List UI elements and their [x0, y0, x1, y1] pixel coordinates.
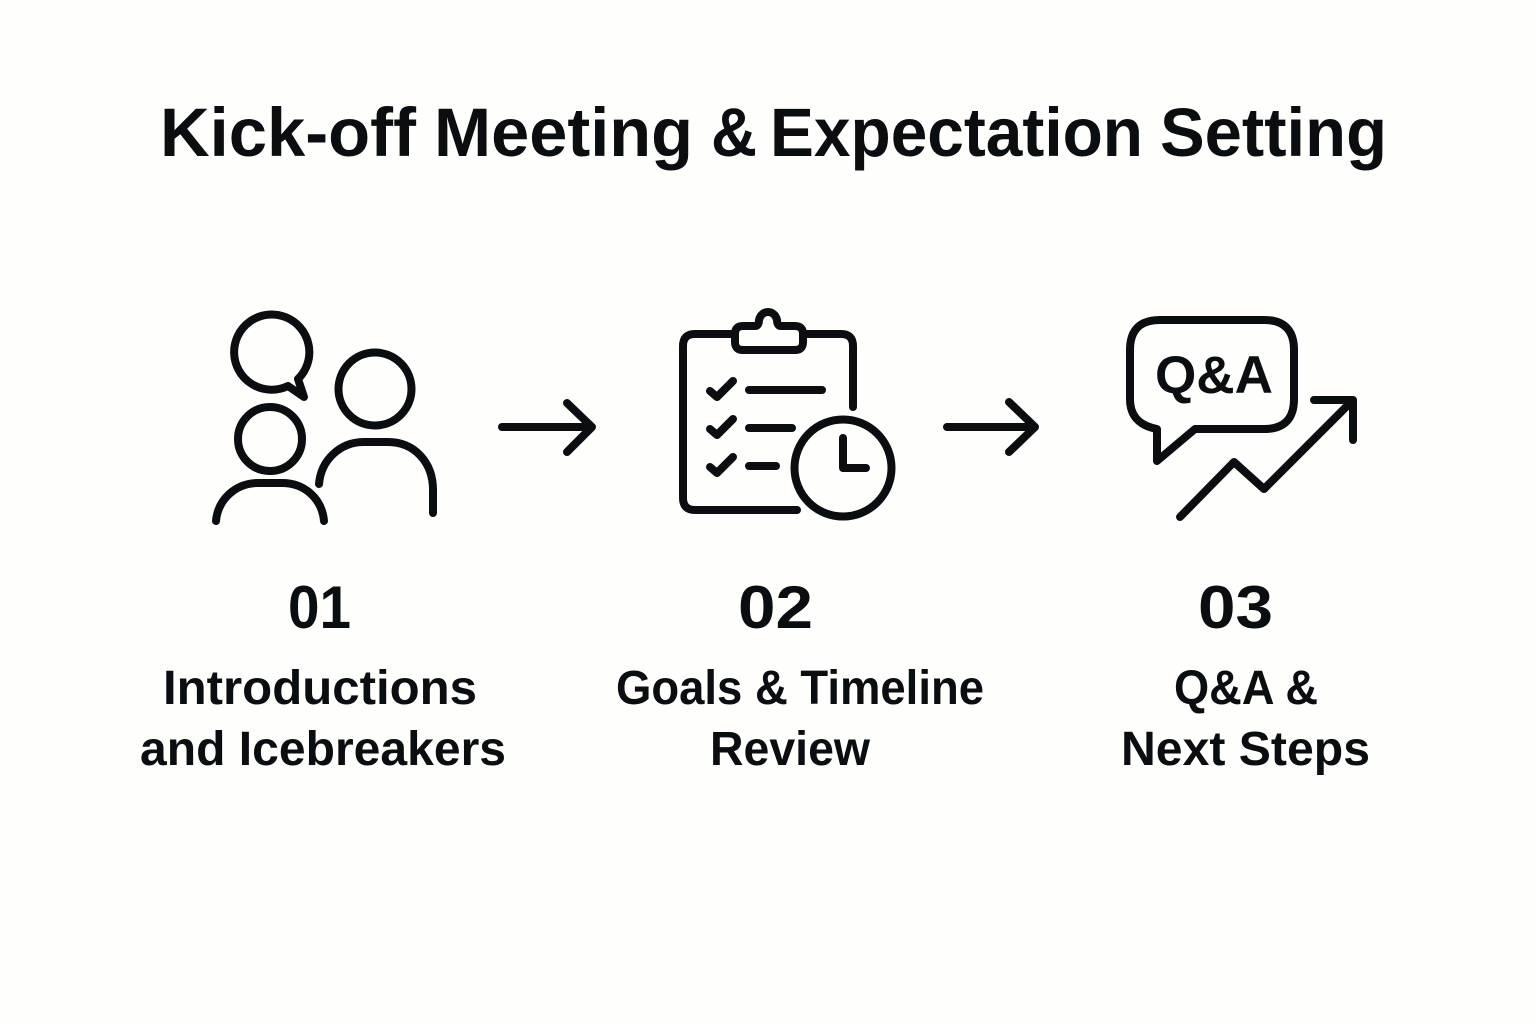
arrow: step 2 to step 3 [947, 402, 1035, 452]
icon: clipboard with checklist and clock [683, 312, 892, 516]
title [160, 94, 1387, 171]
title: & [711, 94, 757, 171]
icon: Q&A speech bubble with rising trend arrow: Q&A [1155, 346, 1273, 405]
step number 03: 03 [1198, 574, 1273, 641]
step label: introductions and icebreakers: and Icebreakers [140, 723, 506, 776]
title: Kick-off [160, 94, 417, 171]
step label: introductions and icebreakers: Introductions [163, 662, 477, 715]
title: Meeting [434, 94, 693, 171]
step label: q and a and next steps: Next Steps [1121, 723, 1370, 776]
title: Setting [1160, 94, 1387, 171]
step number 01: 01 [288, 574, 351, 641]
step label: q and a and next steps: Q&A & [1174, 662, 1318, 715]
panel: step 2 goals and timeline [616, 312, 984, 776]
panel: step 1 introductions [140, 315, 506, 776]
step label: goals and timeline review [616, 662, 984, 776]
step label: q and a and next steps [1121, 662, 1370, 776]
icon: two people with speech bubble [216, 315, 433, 521]
icon: Q&A speech bubble with rising trend arrow [1130, 320, 1353, 517]
panel: step 3 q and a [1121, 320, 1370, 776]
step label: goals and timeline review: Goals & Timeline [616, 662, 984, 715]
arrow: step 1 to step 2 [502, 403, 592, 452]
step label: goals and timeline review: Review [710, 723, 871, 776]
title: Expectation [770, 94, 1143, 171]
step label: introductions and icebreakers [140, 662, 506, 776]
step number 02: 02 [738, 574, 813, 641]
